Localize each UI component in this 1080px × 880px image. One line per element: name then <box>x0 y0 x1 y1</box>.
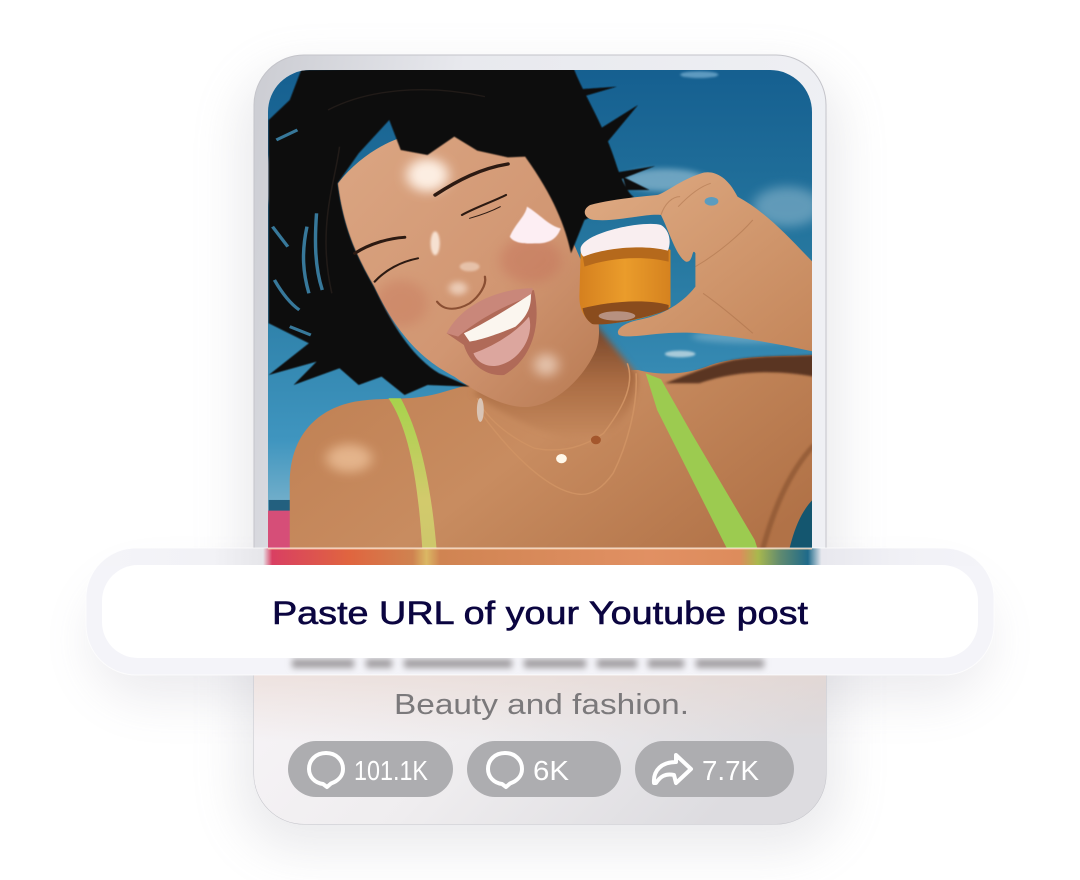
photo: woman holding orange jar <box>268 70 812 548</box>
mouth <box>447 288 537 375</box>
comments badge <box>467 741 621 797</box>
pill label: Paste URL of your Youtube post <box>272 595 808 631</box>
necklaces <box>477 363 636 494</box>
likes badge <box>288 741 453 797</box>
pill white field <box>102 565 978 658</box>
icon: speech bubble <box>488 753 522 787</box>
glass url pill <box>86 548 994 675</box>
neck <box>475 324 639 427</box>
shoulder shadow <box>665 355 814 383</box>
nose shadow <box>437 277 485 309</box>
card shadow <box>90 70 990 850</box>
right strap <box>646 373 758 548</box>
comments badge: 6K <box>533 755 569 786</box>
right eye and eyebrow <box>435 164 508 218</box>
left strap <box>388 398 436 548</box>
hand <box>585 172 814 352</box>
face <box>338 130 599 407</box>
arm fold shadow and sea <box>760 444 812 548</box>
likes badge: 101.1K <box>354 755 428 786</box>
left eye and eyebrow <box>355 237 418 282</box>
hair <box>269 67 655 395</box>
pink towel <box>268 510 290 548</box>
cream on cheek <box>510 207 561 244</box>
shoulder highlight <box>326 444 372 472</box>
sky gaps in hair <box>273 130 322 335</box>
hair gloss <box>326 90 485 293</box>
cheek blush <box>374 280 428 327</box>
body and shoulders <box>290 355 812 548</box>
blurred text strip behind pill bottom <box>292 659 764 668</box>
card frame <box>254 55 826 824</box>
jar lid <box>581 224 670 257</box>
category text: Beauty and fashion. <box>394 689 689 721</box>
jar <box>579 224 671 324</box>
icon: share arrow <box>654 755 691 783</box>
shares badge: 7.7K <box>702 755 759 786</box>
blurred photo strip behind pill top <box>86 548 994 668</box>
sky background <box>268 70 812 511</box>
icon: speech bubble <box>309 753 343 787</box>
skin shine highlights <box>406 158 558 376</box>
hand creases <box>661 183 753 333</box>
necklace pendants <box>477 398 601 463</box>
card lower panel <box>254 675 826 824</box>
shares badge <box>635 741 794 797</box>
